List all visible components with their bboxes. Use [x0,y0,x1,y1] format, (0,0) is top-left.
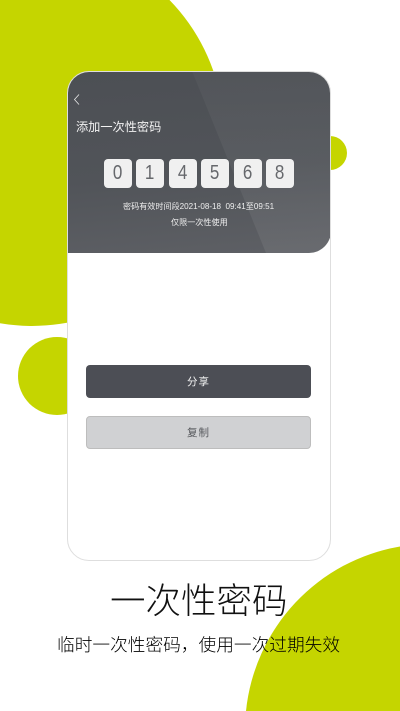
decorative circle: top left [0,0,224,326]
subheading: 临时一次性密码，使用一次过期失效 [57,635,340,655]
header diagonal sheen [227,156,330,253]
main heading: 一次性密码 [110,581,288,621]
header title: 添加一次性密码 [76,120,161,134]
digit 0: 0 [113,162,123,184]
share button: 分享 [187,376,210,388]
header panel [67,71,331,253]
digit 5: 5 [210,162,220,184]
digit 4: 4 [178,162,188,184]
digit 1: 1 [145,162,155,184]
single use note: 仅限一次性使用 [171,218,228,227]
decorative circle: right small [313,136,347,170]
back arrow icon [74,94,80,105]
validity time text: 密码有效时间段2021-08-18 09:41至09:51 [123,202,274,211]
digit 8 [266,159,294,188]
digit 5 [201,159,229,188]
digit 8: 8 [275,162,285,184]
decorative circle: bottom right [246,546,400,711]
copy button: 复制 [187,427,210,439]
share button [86,365,311,398]
digit 6 [234,159,262,188]
copy button [86,416,311,449]
phone card [67,71,331,561]
password digits [104,159,294,188]
digit 0 [104,159,132,188]
digit 4 [169,159,197,188]
decorative circle: left middle [18,337,96,415]
digit 1 [136,159,164,188]
digit 6: 6 [243,162,253,184]
